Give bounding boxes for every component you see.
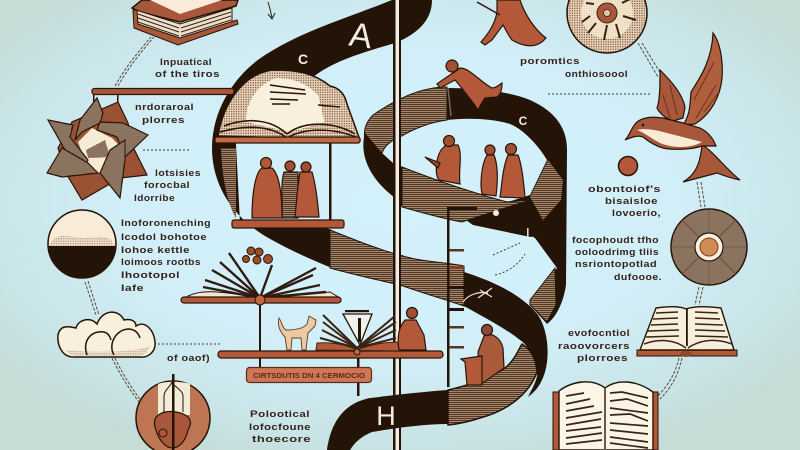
figure: crawling man on the ribbon — [437, 60, 502, 116]
bird near wing — [683, 33, 722, 125]
figure: walking man top — [477, 0, 546, 46]
ribbon top black segment — [212, 0, 432, 268]
dashed marks and small arrow — [463, 243, 525, 302]
text: focophoudt block: ooloodrimg tliis — [575, 247, 659, 258]
ribbon loop black turn — [363, 133, 402, 207]
icon: folded star — [47, 98, 148, 200]
figures: three people under the book — [252, 158, 319, 218]
icon: bottom left circle with scroll — [136, 374, 210, 450]
text: long paragraph: Icodol bohotoe — [121, 232, 207, 243]
text: nrdoraroal plorres: nrdoraroal — [135, 102, 194, 113]
person left — [252, 168, 282, 218]
banner — [246, 368, 372, 382]
lower black band with H — [327, 390, 448, 450]
text: long paragraph: Ihootopol — [121, 270, 180, 281]
icon: large book bottom right — [553, 382, 658, 450]
flowers — [242, 247, 272, 264]
text: long paragraph: loimoos rootbs — [121, 257, 201, 268]
text: nrdoraroal plorres — [135, 102, 194, 126]
text: focophoudt block: focophoudt tfho — [572, 235, 659, 246]
book pages — [640, 307, 734, 350]
text: bottom label: Polootical — [250, 409, 310, 420]
text: evofocntiol block: raoovorcers — [558, 341, 630, 352]
dotted rule by cloud — [158, 343, 221, 345]
ribbon left hatched strip — [221, 148, 236, 218]
fan pages — [320, 315, 396, 348]
text: focophoudt block — [572, 235, 662, 283]
text: of oaof: of oaof) — [167, 353, 210, 364]
ribbon: lower H band — [327, 344, 537, 450]
fan book pages — [188, 292, 340, 298]
book bottom cover — [133, 10, 238, 45]
text: long paragraph — [121, 218, 211, 294]
ladder scale — [447, 207, 477, 387]
text: bottom label: Iofocfoune — [249, 422, 311, 433]
ribbon letters: C — [519, 114, 528, 128]
text: obontoiof's block — [588, 184, 661, 219]
figures: two standing people — [481, 144, 525, 198]
hub — [255, 295, 265, 305]
ribbon right hatched wedge — [530, 268, 556, 322]
ribbon lower left hatched — [402, 167, 530, 222]
connector lines between icons — [85, 37, 705, 402]
book on lower shelf base — [316, 342, 402, 351]
ribbon letters: A — [347, 16, 375, 56]
text: long paragraph: Inoforonenching — [121, 218, 211, 229]
book text lines — [220, 85, 358, 138]
text: obontoiof's block: obontoiof's — [588, 184, 661, 195]
text: inputical of the tiros: Inpuatical — [160, 57, 212, 68]
icon: goat — [278, 316, 316, 350]
text: obontoiof's block: lovoerio, — [612, 208, 661, 219]
text: inputical of the tiros — [155, 57, 220, 80]
icon: cloud — [58, 312, 155, 357]
book pages block — [136, 8, 232, 40]
ribbon black sweep right — [464, 272, 548, 397]
top shelf bar — [92, 88, 234, 94]
lower hatched curve — [448, 344, 537, 425]
ribbon letters: C — [298, 51, 308, 67]
text: poromtics onthiosoool: poromtics — [520, 56, 580, 67]
icon: bird — [625, 33, 740, 182]
ribbon letters: H — [376, 401, 396, 431]
upper left shelf connector posts — [93, 94, 118, 102]
vertical central pole — [393, 0, 401, 450]
ribbon upper right loop — [447, 88, 567, 324]
dotted rule — [143, 149, 190, 151]
bird belly — [637, 129, 702, 147]
text: obontoiof's block: bisaisloe — [605, 196, 658, 207]
book cover — [553, 392, 658, 450]
text: long paragraph: Iohoe kettle — [121, 245, 190, 256]
ribbon middle hatched band — [330, 230, 464, 306]
book shelf — [215, 137, 360, 143]
icon: small circle — [618, 156, 638, 176]
text: evofocntiol block — [558, 328, 630, 364]
shelf under people — [232, 220, 344, 228]
figure: man at desk — [461, 324, 504, 385]
post from shelf to lower shelf — [259, 305, 261, 351]
text: lotsisies forocbal idorribe: forocbal — [144, 180, 190, 191]
banner: CIRTSDUTIS DN 4 CERMOCIO — [253, 373, 366, 380]
shelf bar — [181, 297, 341, 303]
ribbon letters — [298, 16, 534, 431]
icon: sun circle — [567, 0, 647, 53]
star centre — [78, 128, 124, 173]
icon: triangle emblem with open book — [316, 310, 402, 355]
lower shelf — [218, 351, 443, 358]
middle shelf with fan book — [181, 247, 341, 305]
ribbon letters: L — [526, 225, 534, 242]
bird far wing — [657, 70, 685, 121]
bird tail — [683, 145, 740, 182]
text: nrdoraroal plorres: plorres — [142, 115, 185, 126]
book base — [637, 350, 737, 356]
icon: half circle — [48, 210, 116, 278]
star blades — [75, 98, 103, 140]
icon: small arrow top — [268, 2, 275, 19]
text: focophoudt block: dufoooe. — [614, 272, 662, 283]
text: poromtics onthiosoool: onthiosoool — [565, 69, 628, 80]
text: poromtics onthiosoool — [520, 56, 628, 80]
text: lotsisies forocbal idorribe: lotsisies — [155, 168, 201, 179]
ribbon: upper and left spiral band — [212, 0, 567, 397]
icon: disc with rays — [671, 209, 747, 285]
text: lotsisies forocbal idorribe — [134, 168, 201, 204]
thin support pole — [329, 143, 332, 221]
icon: large open book on the arch — [215, 70, 360, 143]
book page highlight — [246, 78, 325, 132]
text: bottom label: thoecore — [252, 434, 311, 445]
book pages — [559, 382, 653, 450]
bird body — [625, 117, 716, 149]
person middle — [282, 172, 298, 218]
text: long paragraph: Iafe — [121, 283, 144, 294]
book pages — [218, 70, 360, 140]
figures: monk with book — [425, 136, 460, 184]
text: bottom label — [249, 409, 311, 445]
figure: seated man — [398, 308, 426, 350]
ribbon upper right hatched strip — [530, 160, 563, 220]
star brown back — [58, 102, 147, 200]
icon: open book right — [637, 307, 737, 357]
icon: top book — [132, 0, 238, 45]
text: inputical of the tiros: of the tiros — [155, 69, 220, 80]
dotted rule right — [548, 93, 652, 95]
ribbon upper left loop hatched — [364, 87, 447, 153]
triangle emblem — [343, 314, 372, 345]
post under lower shelf — [259, 358, 360, 396]
text: evofocntiol block: plorroes — [577, 353, 628, 364]
book cover top — [132, 0, 238, 22]
person right — [295, 172, 319, 217]
text: evofocntiol block: evofocntiol — [568, 328, 630, 339]
text: focophoudt block: nsriontopotlad — [575, 259, 657, 270]
text: lotsisies forocbal idorribe: Idorribe — [134, 193, 175, 204]
